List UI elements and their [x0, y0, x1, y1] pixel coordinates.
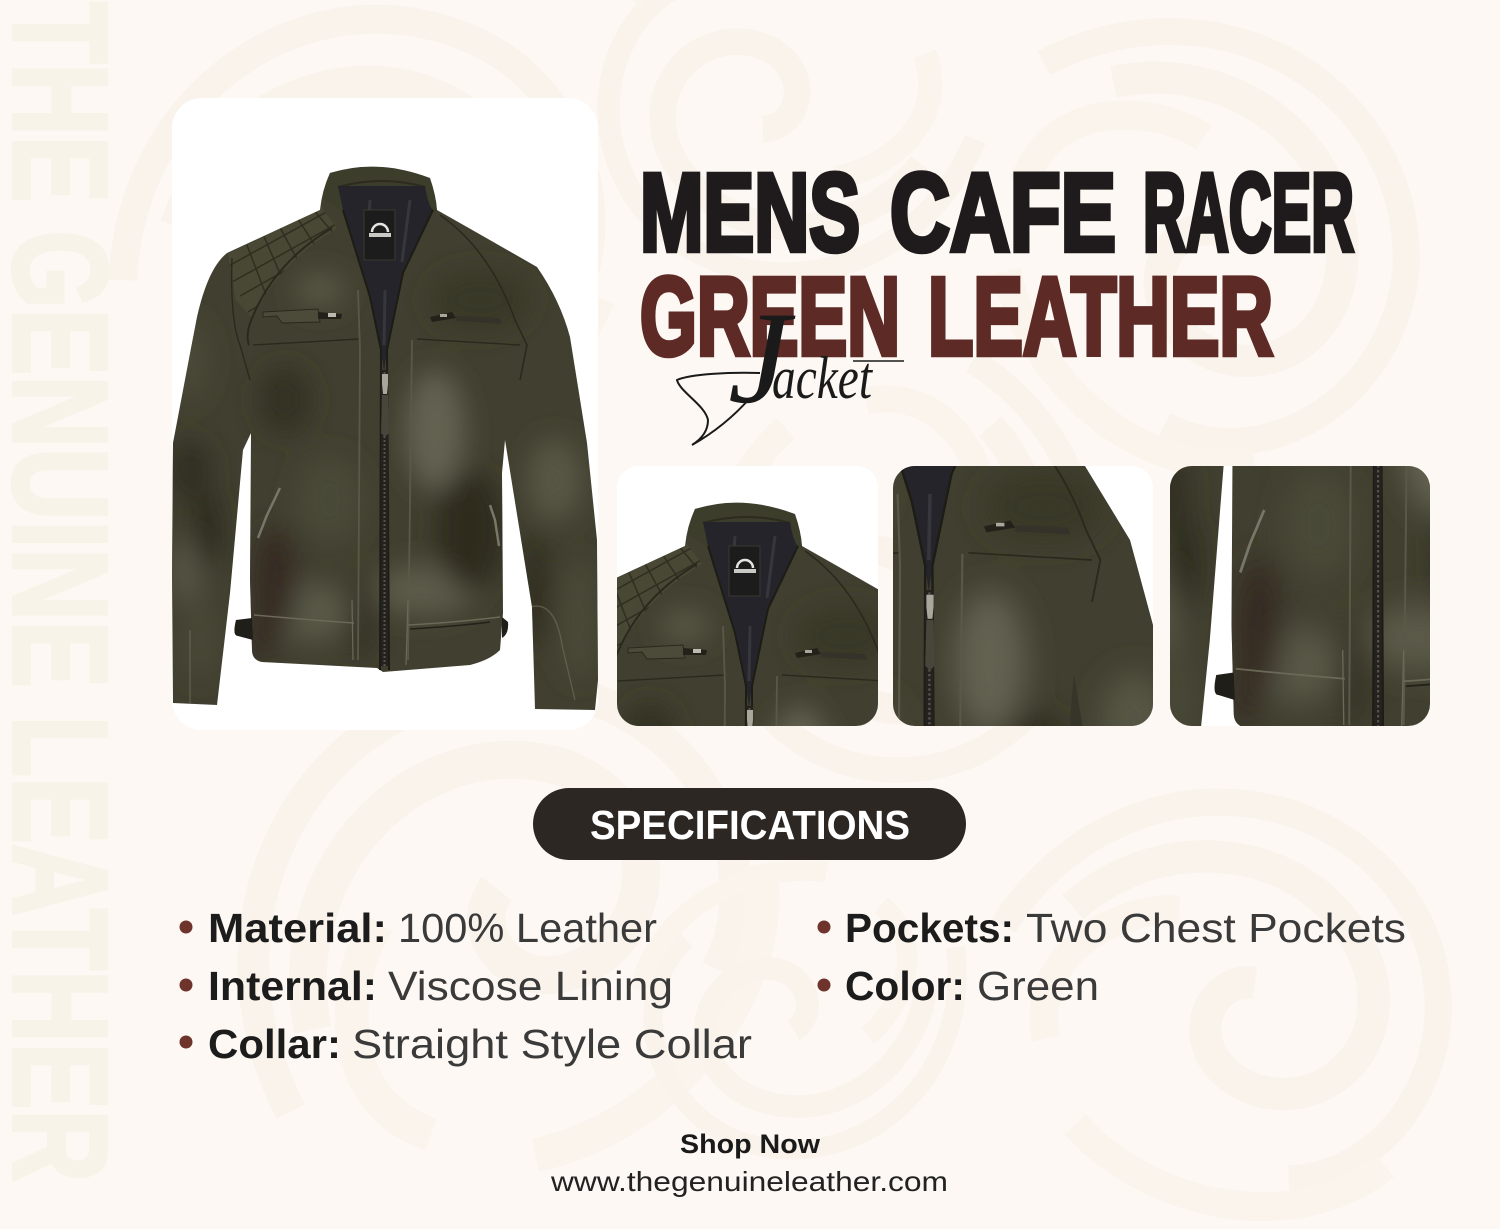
title line one: CAFE: [890, 152, 1116, 274]
thumbnail: lower pocket and zipper detail: [1170, 466, 1430, 726]
item: collar: Collar:: [208, 1021, 341, 1067]
item: material: Material:: [208, 905, 387, 951]
specifications badge: SPECIFICATIONS: [590, 802, 910, 848]
script word: Jacket: acket: [772, 345, 873, 411]
specifications badge: [533, 788, 966, 860]
website: www.thegenuineleather.com: [550, 1166, 948, 1197]
item: collar: Straight Style Collar: [352, 1021, 752, 1067]
title line two: LEATHER: [928, 256, 1273, 378]
item: pockets: Two Chest Pockets: [1026, 905, 1406, 951]
title: [640, 152, 1354, 378]
item: pockets: Pockets:: [845, 905, 1014, 951]
script word: Jacket: J: [728, 284, 796, 431]
item: internal: Viscose Lining: [388, 963, 673, 1009]
item: color: Green: [977, 963, 1099, 1009]
title line two: GREEN: [640, 256, 900, 378]
item: internal: Internal:: [208, 963, 377, 1009]
item: collar: [180, 1021, 752, 1067]
specification list: right column: [818, 905, 1406, 1009]
main jacket image card: [165, 98, 605, 730]
title line one: [640, 152, 1354, 274]
item: pockets: [818, 905, 1406, 951]
call to action: Shop Now: [680, 1129, 821, 1159]
script word: Jacket: [677, 284, 904, 445]
item: material: [180, 905, 657, 951]
item: color: [818, 963, 1099, 1009]
title line one: MENS: [640, 152, 860, 274]
specification list: left column: [180, 905, 752, 1067]
background: [669, 438, 1350, 1188]
item: internal: [180, 963, 673, 1009]
title line two: [640, 256, 1273, 378]
thumbnail: chest pocket detail: [893, 466, 1153, 726]
thumbnail: collar detail: [617, 466, 878, 726]
item: material: 100% Leather: [398, 905, 657, 951]
item: color: Color:: [845, 963, 965, 1009]
